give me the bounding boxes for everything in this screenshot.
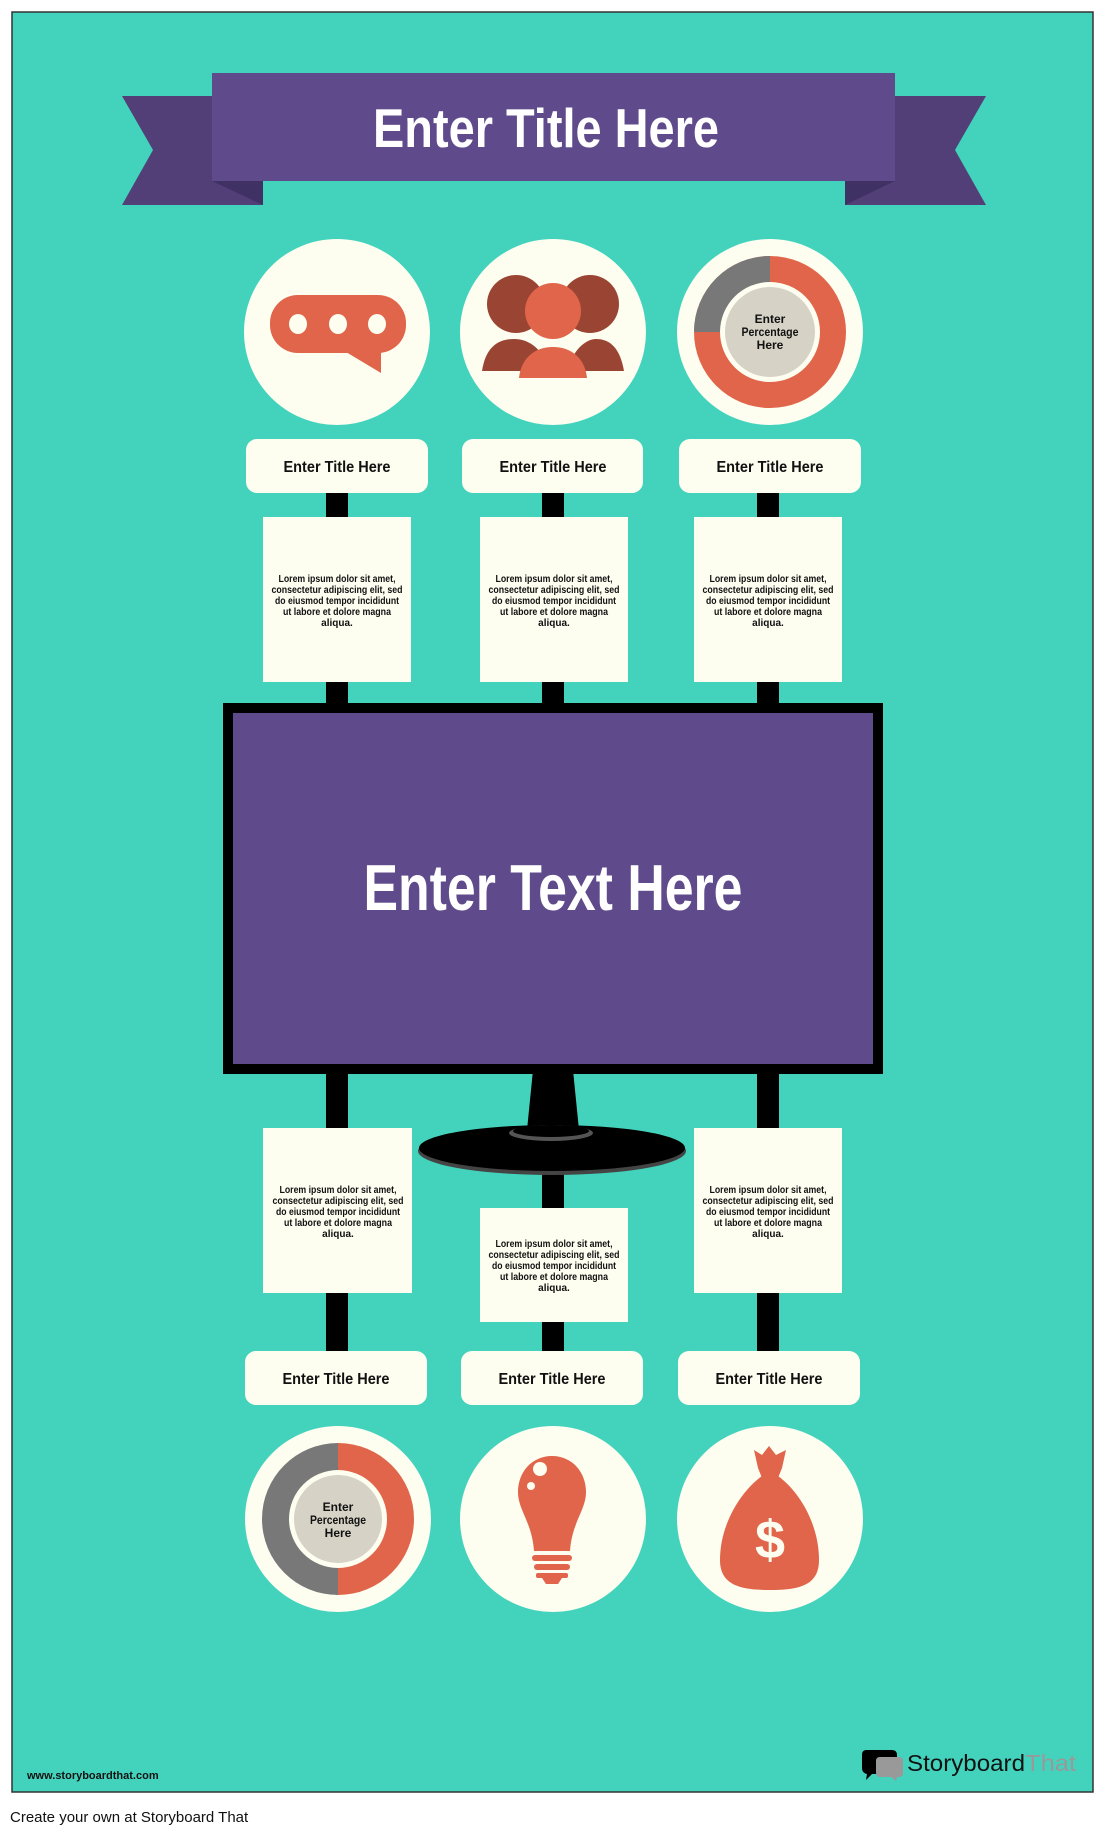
title boxes bottom: Enter Title Here [498, 1371, 606, 1388]
text boxes bottom [263, 1128, 842, 1322]
text boxes top: Lorem ipsum dolor sit amet, [278, 574, 396, 585]
monitor text: Enter Text Here [364, 851, 742, 924]
text boxes top: do eiusmod tempor incididunt [706, 596, 831, 607]
connectors [326, 490, 779, 1354]
title: Enter Title Here [373, 97, 719, 159]
text boxes top: Lorem ipsum dolor sit amet, [496, 574, 613, 585]
text boxes top: do eiusmod tempor incididunt [492, 596, 617, 607]
icon: money bag [677, 1426, 863, 1612]
text boxes bottom: aliqua. [322, 1229, 354, 1240]
text boxes top: ut labore et dolore magna [714, 607, 822, 618]
logo: That [1025, 1750, 1077, 1776]
text boxes top: aliqua. [752, 618, 784, 629]
chart: donut bottom: Here [325, 1526, 352, 1540]
chart: donut bottom: Percentage [310, 1513, 366, 1527]
text boxes top: ut labore et dolore magna [283, 607, 391, 618]
text boxes bottom: consectetur adipiscing elit, sed [272, 1196, 404, 1207]
icon: people [460, 239, 646, 425]
text boxes bottom: do eiusmod tempor incididunt [276, 1207, 401, 1218]
footer caption: Create your own at Storyboard That [10, 1809, 249, 1826]
text boxes top: consectetur adipiscing elit, sed [702, 585, 834, 596]
logo [862, 1750, 1077, 1781]
text boxes bottom: Lorem ipsum dolor sit amet, [496, 1239, 613, 1250]
chart: donut top: Enter [755, 312, 786, 326]
text boxes top: ut labore et dolore magna [500, 607, 608, 618]
text boxes bottom: consectetur adipiscing elit, sed [702, 1196, 834, 1207]
title boxes bottom [245, 1351, 860, 1405]
footer url: www.storyboardthat.com [26, 1770, 159, 1782]
chart: donut top [677, 239, 863, 425]
text boxes top [263, 517, 842, 682]
text boxes bottom: do eiusmod tempor incididunt [706, 1207, 831, 1218]
banner [122, 73, 986, 205]
text boxes bottom: ut labore et dolore magna [500, 1272, 608, 1283]
text boxes bottom: aliqua. [752, 1229, 784, 1240]
title boxes bottom: Enter Title Here [716, 1371, 823, 1388]
text boxes bottom: ut labore et dolore magna [284, 1218, 392, 1229]
title boxes top: Enter Title Here [500, 459, 607, 476]
text boxes top: consectetur adipiscing elit, sed [488, 585, 620, 596]
title boxes top [246, 439, 861, 493]
text boxes bottom: aliqua. [538, 1283, 570, 1294]
monitor [228, 708, 878, 1175]
title boxes bottom: Enter Title Here [282, 1371, 390, 1388]
text boxes bottom: do eiusmod tempor incididunt [492, 1261, 617, 1272]
title boxes top: Enter Title Here [284, 459, 391, 476]
text boxes bottom: consectetur adipiscing elit, sed [488, 1250, 620, 1261]
text boxes bottom: ut labore et dolore magna [714, 1218, 822, 1229]
logo: Storyboard [907, 1750, 1025, 1776]
chart: donut top: Percentage [742, 325, 799, 339]
chart: donut top: Here [757, 338, 784, 352]
text boxes top: aliqua. [538, 618, 570, 629]
text boxes bottom: Lorem ipsum dolor sit amet, [280, 1185, 397, 1196]
text boxes top: do eiusmod tempor incididunt [275, 596, 400, 607]
icon: money bag: $ [755, 1510, 785, 1570]
text boxes top: Lorem ipsum dolor sit amet, [710, 574, 827, 585]
chart: donut bottom: Enter [323, 1500, 354, 1514]
icon: light bulb [460, 1426, 646, 1612]
icon: chat bubble [244, 239, 430, 425]
chart: donut bottom [245, 1426, 431, 1612]
title boxes top: Enter Title Here [716, 459, 824, 476]
text boxes bottom: Lorem ipsum dolor sit amet, [710, 1185, 827, 1196]
text boxes top: aliqua. [321, 618, 353, 629]
text boxes top: consectetur adipiscing elit, sed [272, 585, 402, 596]
